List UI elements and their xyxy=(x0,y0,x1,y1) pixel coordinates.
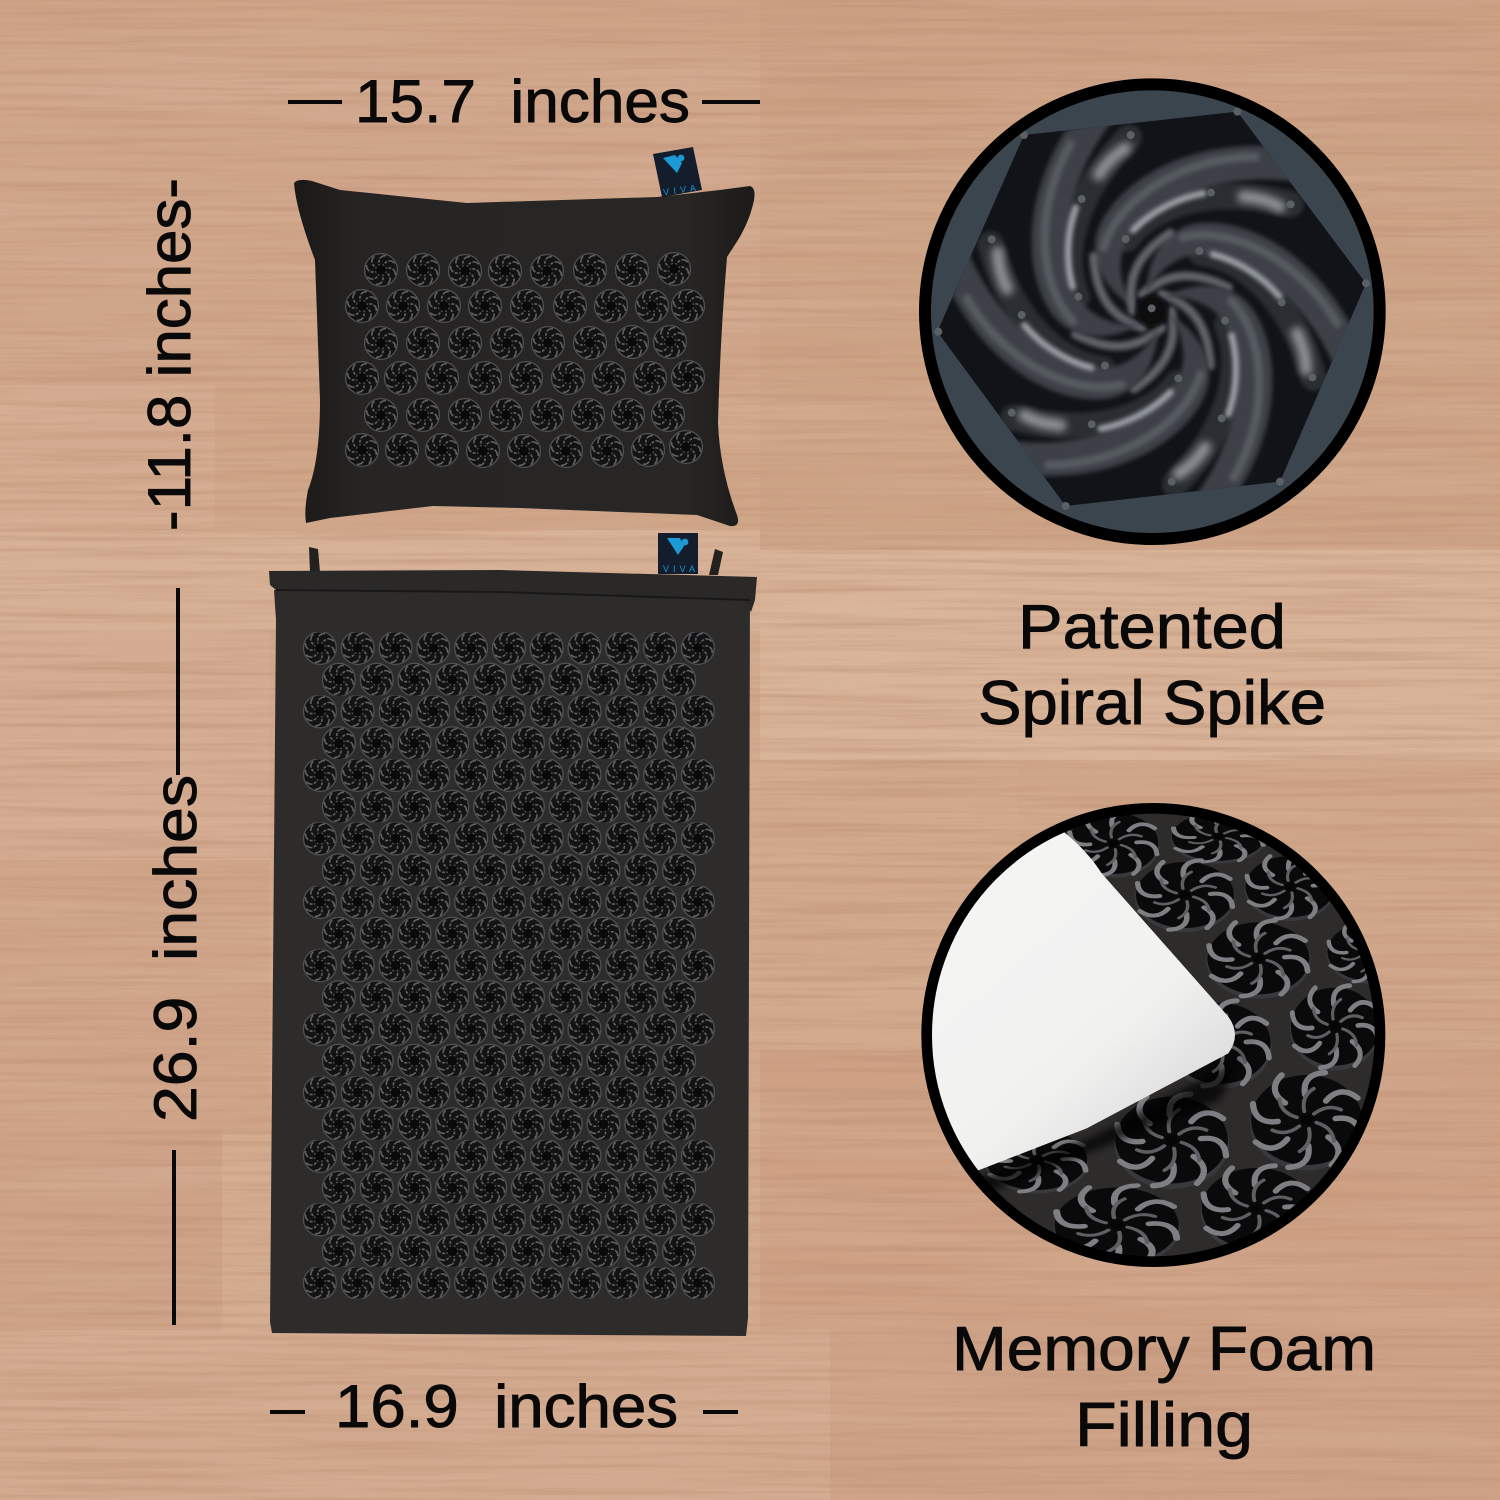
label: patented spiral spike xyxy=(978,593,1326,738)
dimension: pillow height: -11.8 inches- xyxy=(136,178,203,531)
black ring xyxy=(927,808,1380,1262)
dimension: mat length: 26.9 inches xyxy=(142,775,209,1122)
pillow tag xyxy=(653,147,702,197)
label: memory foam filling xyxy=(952,1315,1376,1460)
black ring xyxy=(925,84,1380,539)
label: patented spiral spike: Patented xyxy=(1018,593,1286,662)
mat spikes xyxy=(301,632,717,1299)
dimension: mat width: 16.9 inches xyxy=(335,1373,678,1440)
dimension: mat width xyxy=(270,1373,738,1440)
dimension: pillow width xyxy=(288,68,760,135)
label: patented spiral spike: Spiral Spike xyxy=(978,669,1326,738)
foam block xyxy=(932,832,1235,1170)
mat top band xyxy=(269,570,757,612)
photo circle: spiral spike close-up xyxy=(925,84,1380,539)
label: memory foam filling: Filling xyxy=(1075,1391,1253,1460)
label: memory foam filling: Memory Foam xyxy=(952,1315,1376,1384)
spikes under foam xyxy=(983,808,1408,1268)
mat tag xyxy=(658,533,698,574)
pillow body xyxy=(294,180,754,526)
pillow xyxy=(294,147,754,526)
spike tip dots xyxy=(934,108,1370,510)
photo circle: memory foam filling xyxy=(921,803,1386,1267)
mat tag: VIVA xyxy=(663,564,695,574)
dimension: pillow width: 15.7 inches xyxy=(355,68,690,135)
dimension: mat length xyxy=(142,588,209,1325)
pillow tag: VIVA xyxy=(662,183,697,197)
spike hexagon base xyxy=(937,112,1366,506)
mat body xyxy=(270,590,750,1336)
mat hanging loops xyxy=(309,547,723,575)
mat xyxy=(269,533,757,1336)
spiral arms xyxy=(952,124,1350,494)
foam shadow xyxy=(975,1033,1253,1193)
pillow spikes xyxy=(345,252,705,468)
